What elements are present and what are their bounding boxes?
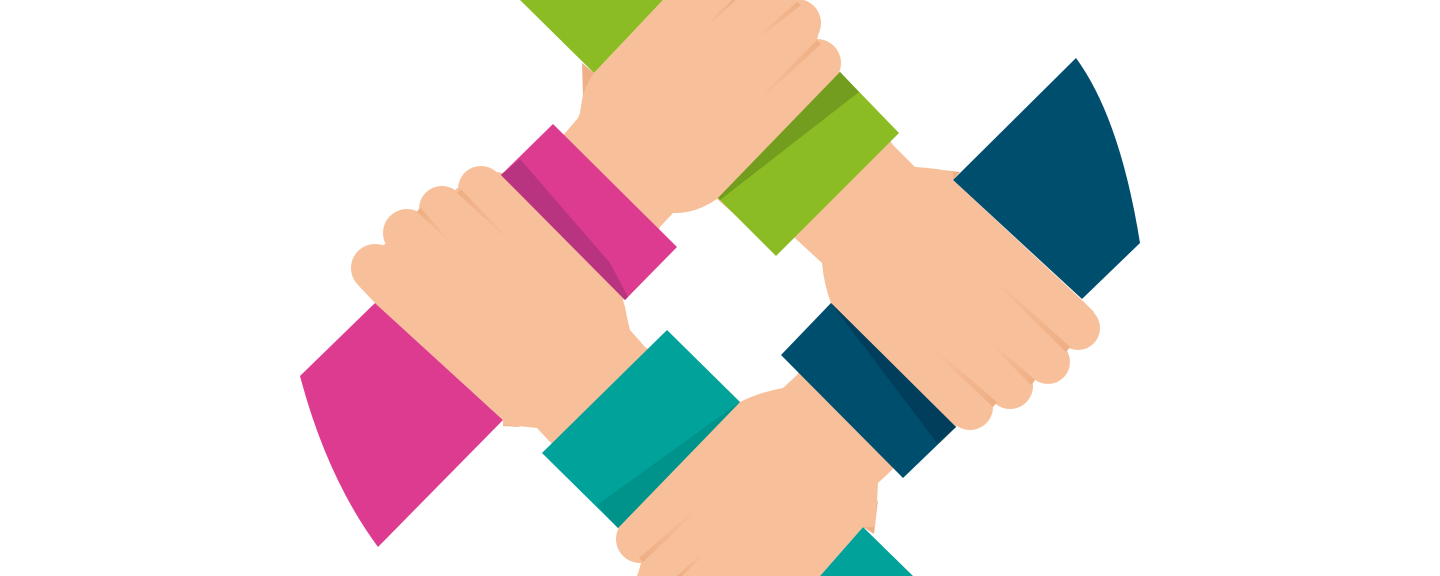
cuff: green <box>718 72 899 256</box>
hand: left, reaching from teal cuff <box>351 165 665 455</box>
sleeve: magenta left <box>300 303 503 547</box>
sleeve: teal bottom <box>820 527 913 576</box>
sleeve: green top <box>520 0 663 73</box>
hand: top, reaching from magenta cuff <box>550 0 855 250</box>
hand: right, reaching from green cuff <box>780 125 1100 443</box>
hand: bottom, reaching from navy cuff <box>605 360 900 576</box>
sleeve: navy right <box>953 58 1140 299</box>
cuff: teal <box>542 330 740 528</box>
cuff: magenta <box>501 124 677 300</box>
cuff: navy <box>781 303 956 478</box>
